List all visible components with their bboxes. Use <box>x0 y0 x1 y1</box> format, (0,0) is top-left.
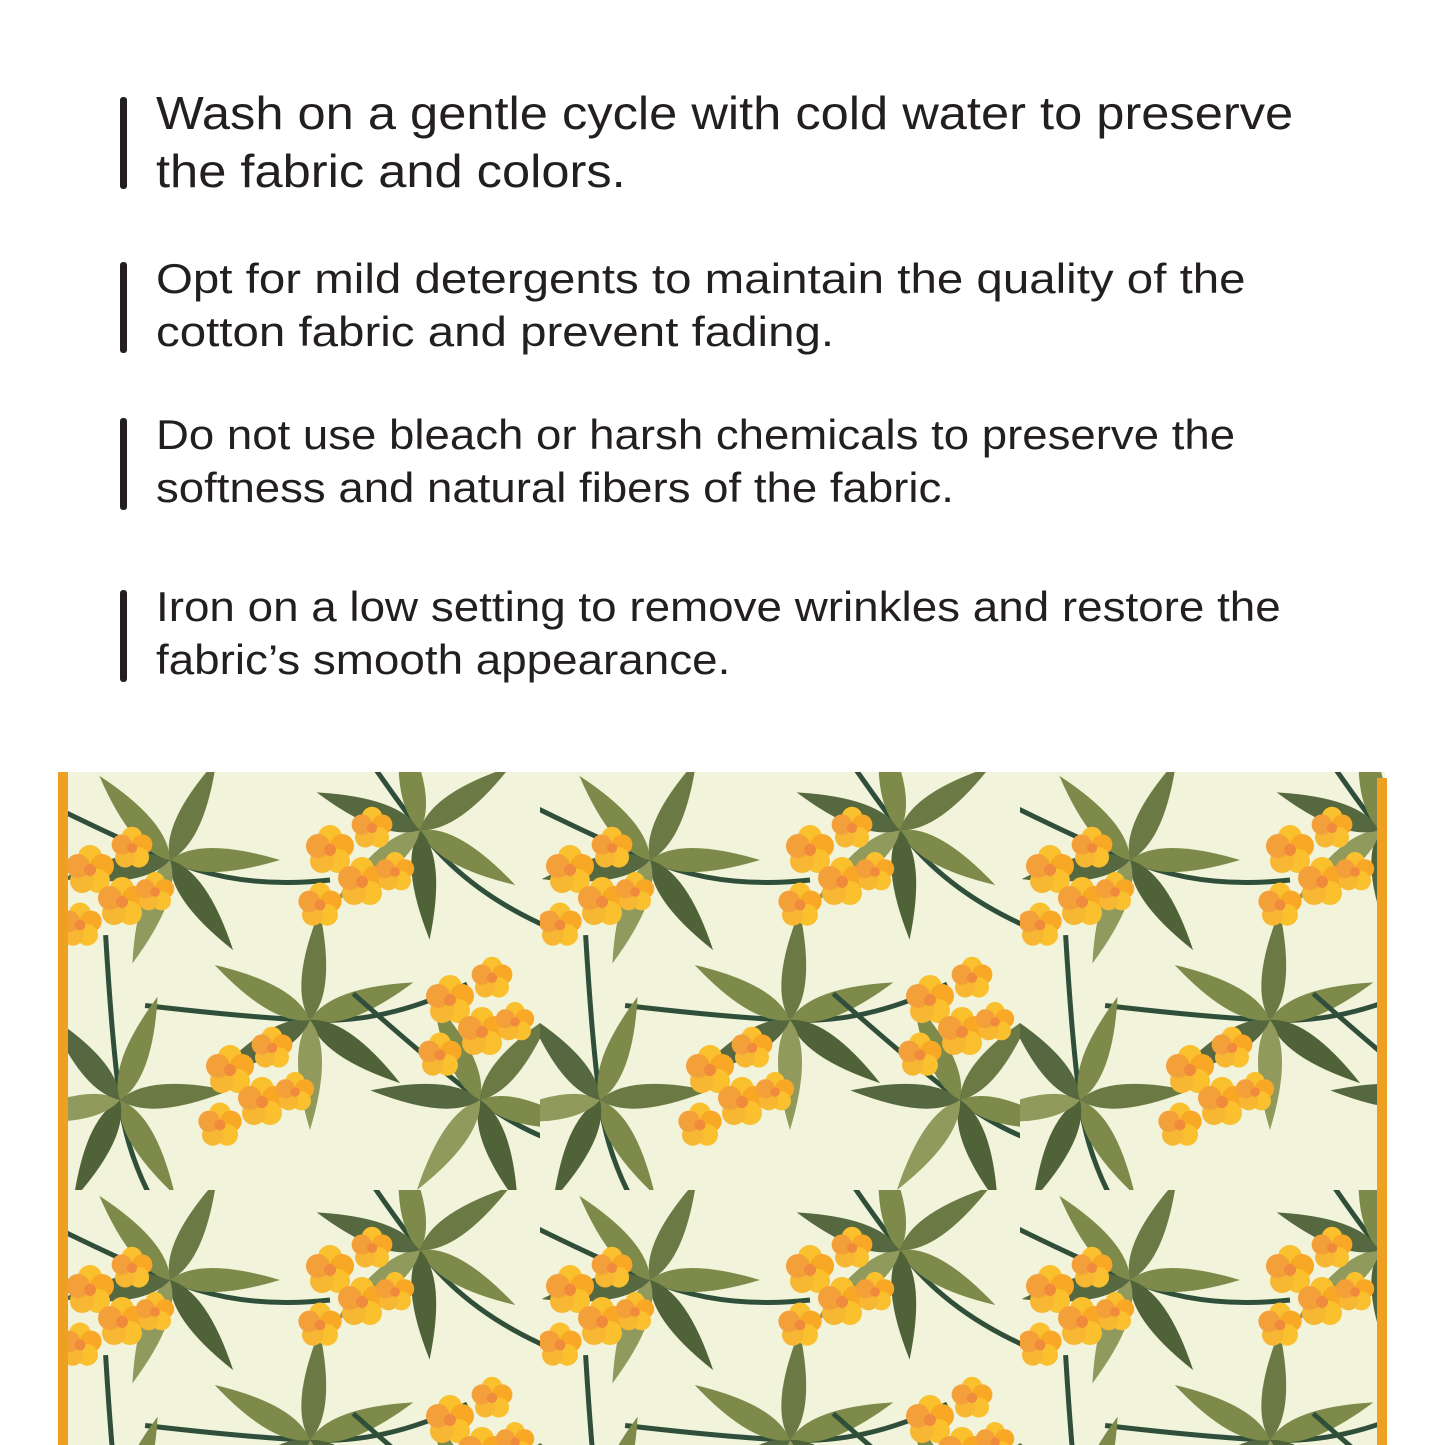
care item 4: fabric’s smooth appearance. <box>156 636 730 683</box>
care item 1: Wash on a gentle cycle with cold water to preserve <box>156 87 1293 139</box>
care item 3 <box>120 411 1235 511</box>
fabric photo: floral pattern <box>58 772 1387 1445</box>
care item 4: Iron on a low setting to remove wrinkles and restore the <box>156 583 1281 630</box>
care item 3: softness and natural fibers of the fabric. <box>156 464 954 511</box>
care item 2 <box>120 255 1246 355</box>
care item 3: Do not use bleach or harsh chemicals to preserve the <box>156 411 1235 458</box>
care item 2: cotton fabric and prevent fading. <box>156 308 834 355</box>
care item 4 <box>120 583 1281 683</box>
care item 1 <box>120 87 1293 197</box>
fabric body <box>58 772 1387 1445</box>
care item 2: Opt for mild detergents to maintain the quality of the <box>156 255 1246 302</box>
care item 1: the fabric and colors. <box>156 145 626 197</box>
